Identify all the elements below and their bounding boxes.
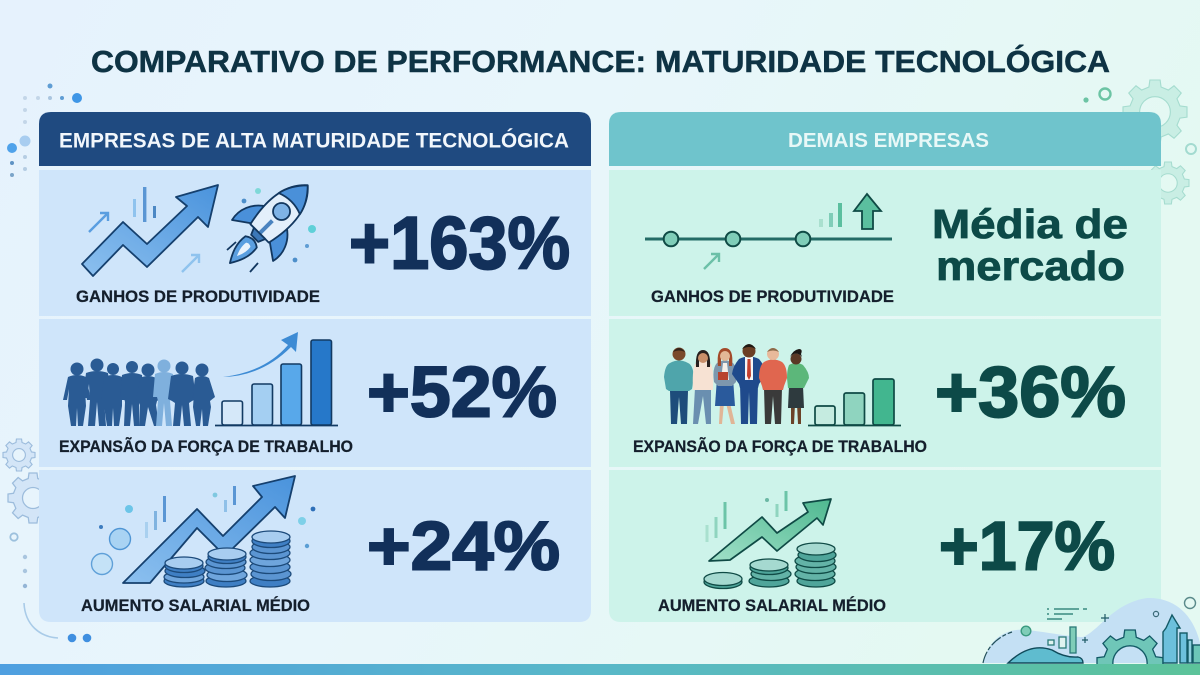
icon: rising arrow: [82, 185, 218, 276]
value: +163%: [349, 202, 570, 284]
label: GANHOS DE PRODUTIVIDADE: [76, 287, 320, 306]
value: +24%: [367, 508, 560, 584]
label: EXPANSÃO DA FORÇA DE TRABALHO: [59, 436, 353, 456]
decoration: bottom-right tech scene: [983, 598, 1200, 675]
panel: empresas de alta maturidade: [39, 112, 591, 622]
left row: produtividade: [39, 164, 591, 316]
value: +52%: [367, 354, 557, 432]
value: mercado: [936, 243, 1125, 289]
label: GANHOS DE PRODUTIVIDADE: [651, 287, 894, 306]
right row: salário: [609, 470, 1161, 622]
decoration: top-left dots: [7, 84, 82, 177]
title: COMPARATIVO DE PERFORMANCE: MATURIDADE TECNOLÓGICA: [91, 43, 1110, 79]
panel: demais empresas: [609, 112, 1161, 622]
left row: força de trabalho: [39, 319, 591, 467]
left header: EMPRESAS DE ALTA MATURIDADE TECNOLÓGICA: [59, 128, 569, 152]
label: AUMENTO SALARIAL MÉDIO: [658, 596, 886, 615]
icon: arrow and coins: [92, 476, 315, 587]
label: EXPANSÃO DA FORÇA DE TRABALHO: [633, 436, 927, 456]
value: +17%: [939, 508, 1115, 584]
value: Média de: [932, 201, 1128, 247]
icon: flat timeline: [645, 194, 892, 269]
icon: green arrow and coins: [704, 491, 836, 588]
right row: produtividade: [609, 170, 1161, 316]
label: AUMENTO SALARIAL MÉDIO: [81, 596, 310, 615]
bottom gradient bar: [0, 664, 1200, 675]
value: [932, 201, 1128, 289]
icon: rocket: [209, 164, 329, 284]
icon: diverse team: [664, 344, 809, 424]
value: +36%: [935, 354, 1126, 432]
icon: workforce silhouettes: [63, 358, 215, 426]
right row: força de trabalho: [609, 319, 1161, 467]
right header: [609, 112, 1161, 166]
decoration: left gears and dots: [3, 439, 91, 642]
left header: [39, 112, 591, 166]
right header: DEMAIS EMPRESAS: [788, 130, 989, 152]
left row: salário: [39, 470, 591, 622]
decoration: top-right gears: [1083, 80, 1196, 204]
chart: growth bars: [215, 332, 338, 426]
chart: modest bars: [808, 379, 901, 426]
